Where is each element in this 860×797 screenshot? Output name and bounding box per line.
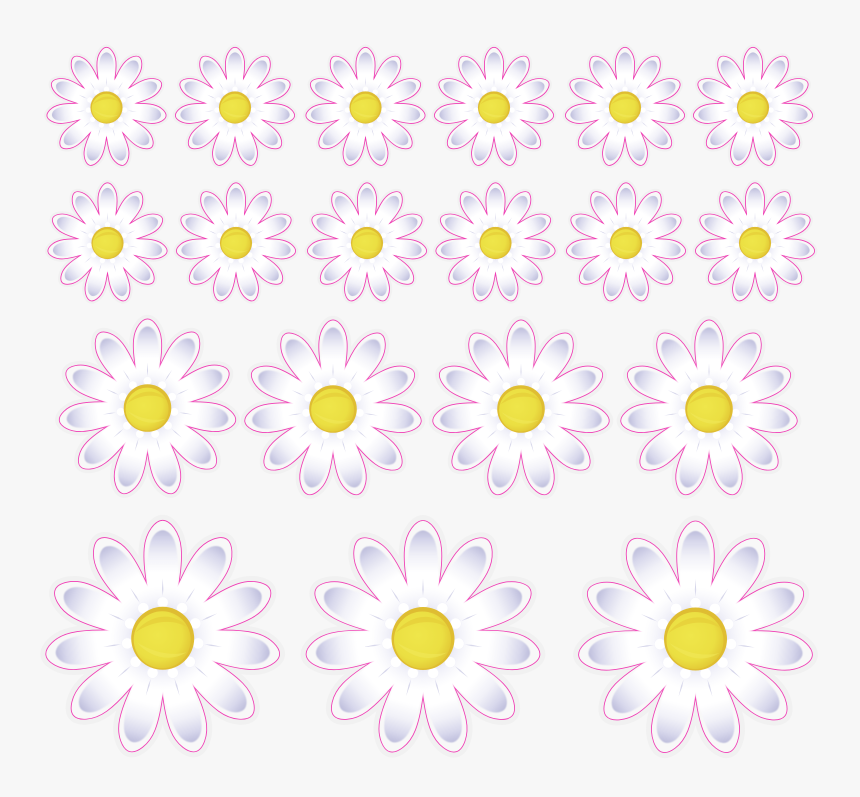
daisy 7 — [47, 183, 168, 303]
daisy 2 — [174, 47, 296, 168]
daisy 3 — [305, 47, 426, 168]
daisy 13 — [57, 319, 238, 497]
daisy 5 — [564, 47, 686, 168]
daisy 11 — [565, 183, 687, 303]
daisy 6 — [692, 47, 814, 168]
row 3: medium daisies — [57, 319, 799, 498]
daisy 16 — [619, 320, 799, 498]
row 2: small daisies — [47, 183, 816, 303]
daisy 8 — [175, 183, 297, 303]
daisy 1 — [46, 47, 167, 168]
daisy 17 — [43, 520, 282, 757]
row 1: small daisies — [46, 47, 814, 168]
daisy 19 — [576, 521, 815, 758]
daisy 18 — [304, 520, 542, 757]
row 4: large daisies — [43, 520, 815, 758]
daisy 12 — [694, 183, 816, 303]
daisy 15 — [431, 320, 611, 498]
daisy 4 — [433, 47, 555, 168]
daisy 14 — [243, 320, 423, 498]
daisy 9 — [306, 183, 428, 303]
daisy 10 — [435, 183, 556, 303]
